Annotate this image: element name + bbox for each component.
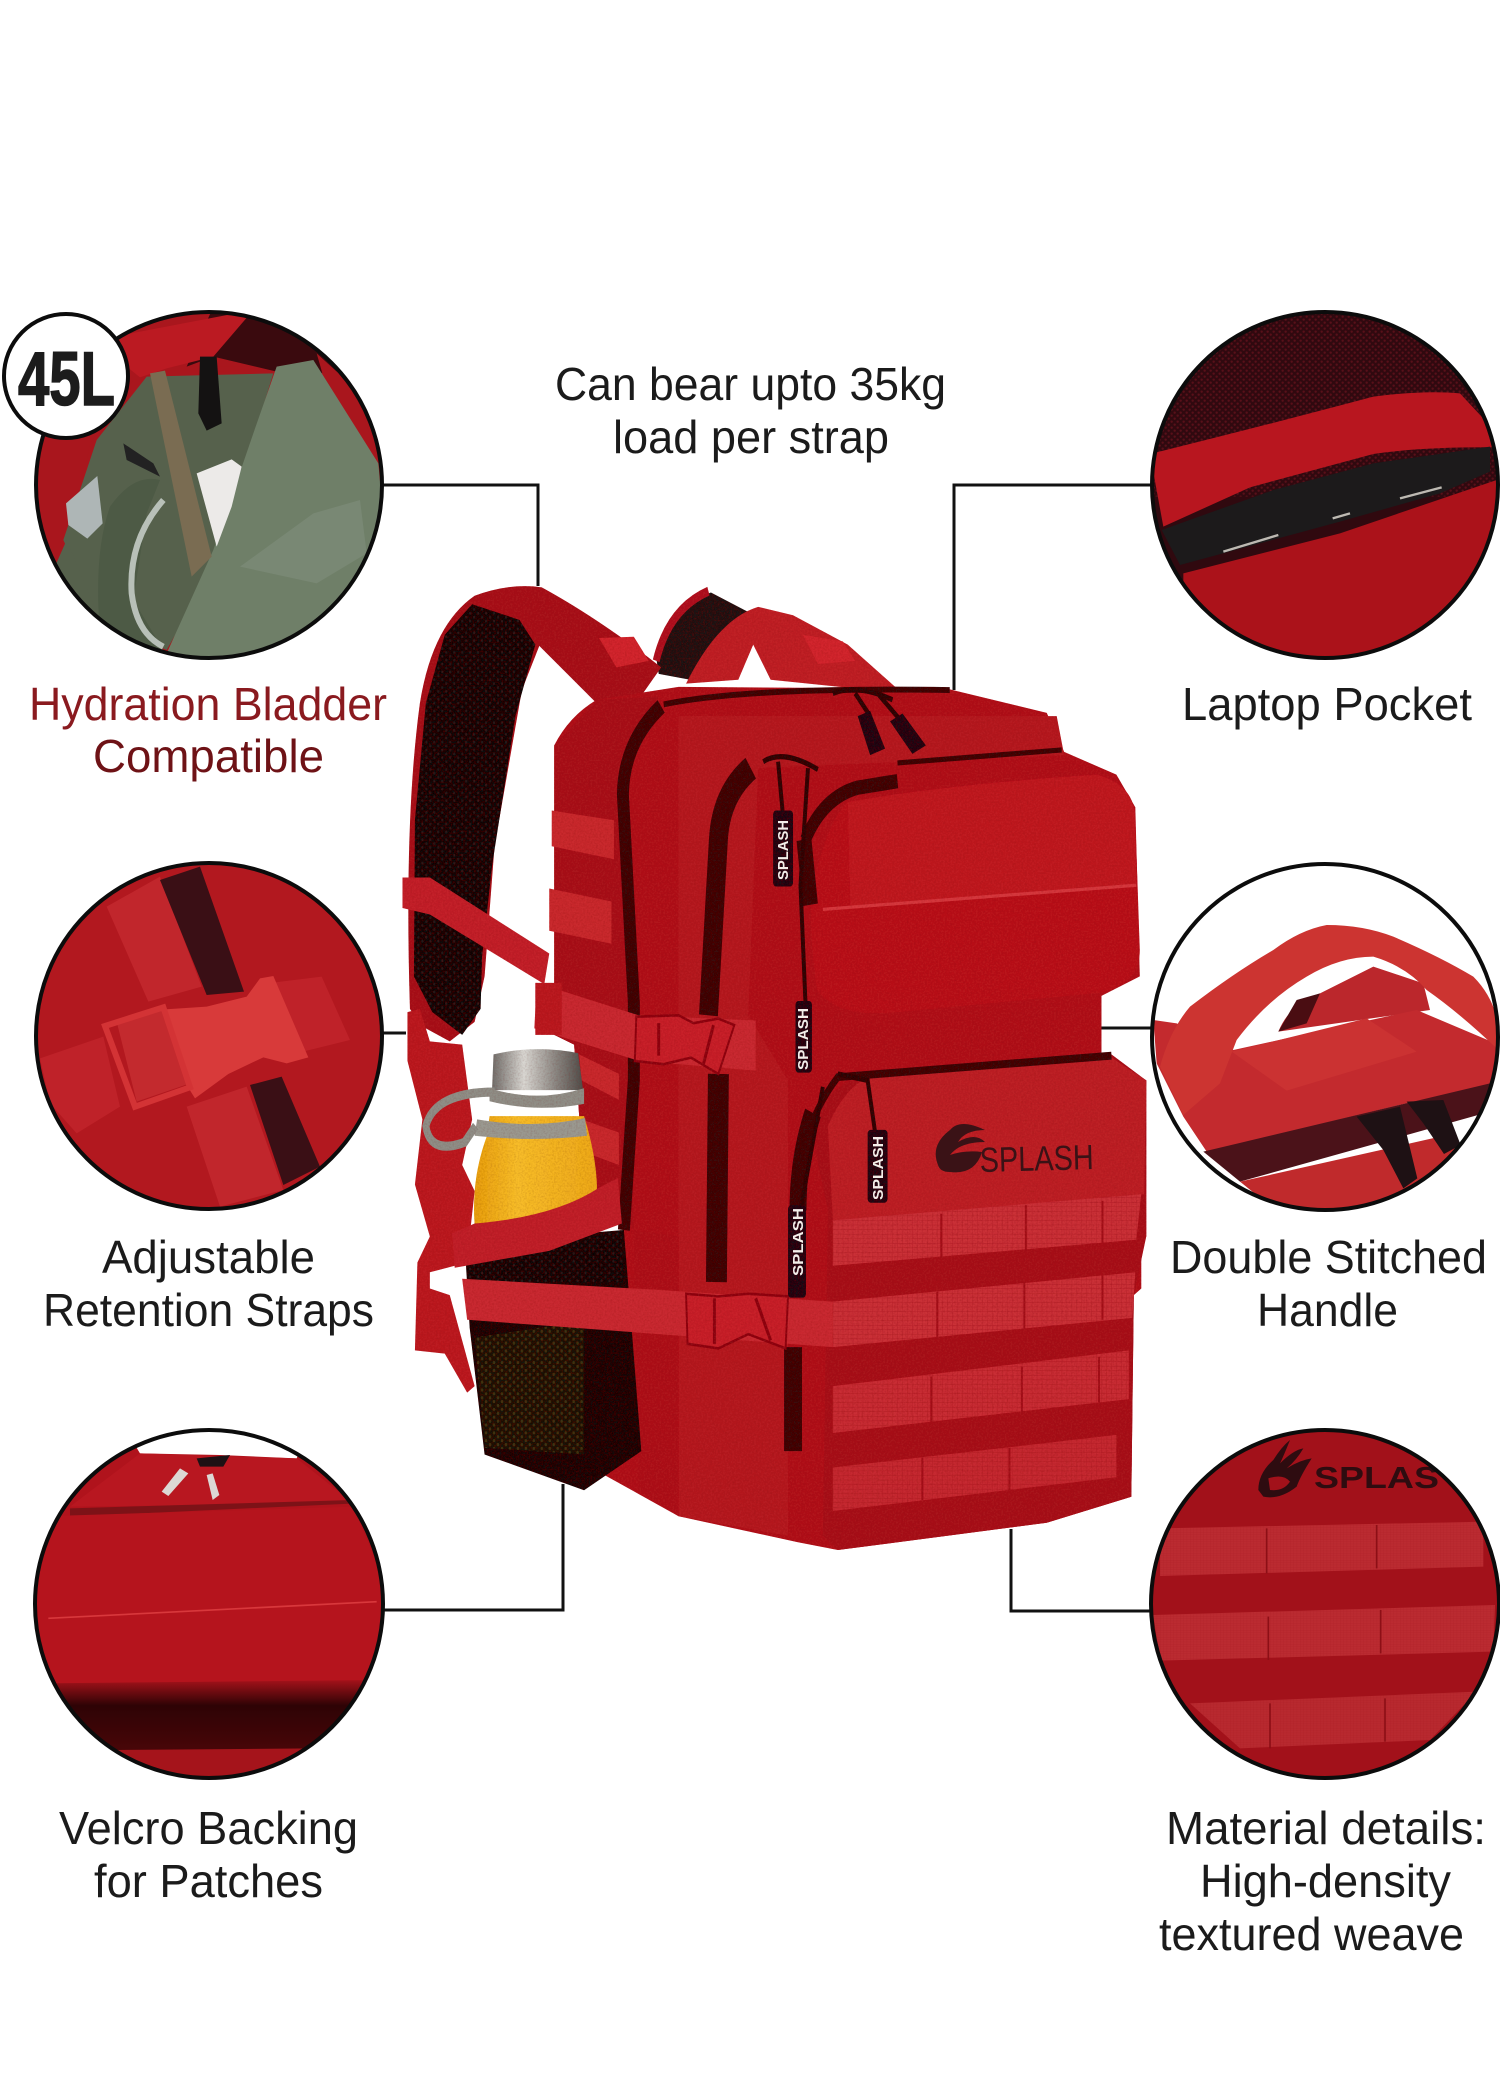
- callout: load per strap: load per strap: [613, 411, 889, 463]
- label: hydration bladder: Compatible: [93, 730, 324, 782]
- webbing rows: [1153, 1522, 1495, 1748]
- red lining: [33, 367, 383, 567]
- zippers: [623, 690, 1062, 1451]
- label: velcro backing: for Patches: [94, 1855, 323, 1907]
- upper front pocket: [804, 775, 1140, 1013]
- label: adjustable retention straps: Adjustable: [102, 1231, 315, 1283]
- label: hydration bladder: Hydration Bladder: [29, 678, 387, 730]
- vertical webbing: [107, 877, 283, 1207]
- side pocket rim: [452, 1178, 622, 1268]
- backpack logo: SPLASH: [979, 1138, 1094, 1180]
- zipper pulls: [763, 690, 902, 1210]
- laptop: [1162, 447, 1490, 565]
- rear handle parts: [1278, 967, 1430, 1032]
- backpack illustration: [402, 586, 1146, 1550]
- upper compression strap with buckle: [534, 983, 756, 1074]
- label: velcro backing: [59, 1802, 358, 1907]
- callout: load per strap: Can bear upto 35kg: [555, 358, 946, 410]
- lower compression strap with buckle: [462, 1279, 833, 1348]
- label: material details: High-density: [1200, 1855, 1451, 1907]
- dark zipper band: [1203, 1083, 1490, 1182]
- seam: [48, 1602, 377, 1618]
- drinking tube: [150, 371, 212, 577]
- zipper: [160, 867, 320, 1185]
- detail circle: laptop pocket: [1140, 310, 1500, 667]
- handle: [1160, 925, 1498, 1115]
- zipper pulls: [1357, 1100, 1461, 1188]
- detail circle: velcro backing: [30, 1420, 387, 1783]
- white backing: [197, 459, 242, 547]
- cropped logo text: SPLAS: [1314, 1460, 1439, 1495]
- zipper tags: [773, 711, 926, 1298]
- folded fabric: [167, 360, 387, 663]
- white gap at top: [120, 1420, 313, 1458]
- sternum strap: [402, 877, 549, 984]
- water bottle: [426, 1049, 597, 1225]
- detail circle: hydration bladder: [33, 307, 387, 663]
- detail circle: retention straps: [36, 863, 382, 1209]
- capacity badge: 45L: 45L: [18, 337, 115, 422]
- lower side straps: [407, 1009, 475, 1393]
- horizontal strap: [40, 977, 350, 1133]
- patch flap: [1271, 1018, 1370, 1042]
- label: hydration bladder: [29, 678, 387, 782]
- label: adjustable retention straps: [43, 1231, 374, 1336]
- lower red fabric: [1183, 480, 1500, 667]
- label: double stitched handle: [1170, 1231, 1487, 1336]
- top panel: [70, 1453, 353, 1507]
- label: material details: [1159, 1802, 1486, 1960]
- lower front pocket: [798, 1054, 1146, 1550]
- upper red band: [1150, 392, 1500, 527]
- lower fabric: [1240, 1138, 1456, 1208]
- label: double stitched handle: Handle: [1257, 1284, 1398, 1336]
- tag label text: SPLASH: [775, 820, 792, 880]
- black hook: [198, 357, 222, 431]
- tag label text: [775, 820, 887, 1276]
- zipper pulls: [197, 1455, 230, 1467]
- tag label text: SPLASH: [790, 1208, 807, 1276]
- bladder seam: [131, 500, 163, 647]
- label: velcro backing: Velcro Backing: [59, 1802, 358, 1854]
- label: adjustable retention straps: Retention Straps: [43, 1284, 374, 1336]
- bladder tag: [66, 476, 103, 539]
- callout: load per strap: [555, 358, 946, 463]
- label: laptop pocket: Laptop Pocket: [1182, 678, 1472, 730]
- shadow under pocket: [40, 1680, 380, 1753]
- velcro panel: [30, 1507, 387, 1707]
- near shoulder strap with mesh padding: [408, 586, 661, 1041]
- side mesh pocket: [465, 1230, 641, 1490]
- leader lines: [382, 485, 1153, 1611]
- label: material details: Material details:: [1166, 1802, 1486, 1854]
- label: double stitched handle: Double Stitched: [1170, 1231, 1487, 1283]
- side webbing loops: [549, 810, 619, 1165]
- wing logo: [1258, 1440, 1312, 1497]
- inner bladder: [63, 373, 273, 650]
- front molle webbing rows: [833, 1194, 1141, 1511]
- mesh lining: [1140, 310, 1500, 497]
- tag label text: SPLASH: [795, 1008, 812, 1070]
- capacity badge: 45L: [4, 314, 128, 438]
- bag top: [1153, 1010, 1500, 1152]
- buckle: [105, 976, 308, 1107]
- backpack logo: [936, 1124, 1094, 1180]
- tag label text: SPLASH: [870, 1136, 887, 1200]
- detail circle: double stitched handle: [1152, 864, 1500, 1217]
- label: material details: textured weave: [1159, 1908, 1464, 1960]
- detail circle: material details: [1151, 1430, 1499, 1778]
- main bag body: [554, 687, 1146, 1550]
- far shoulder strap: [656, 591, 902, 693]
